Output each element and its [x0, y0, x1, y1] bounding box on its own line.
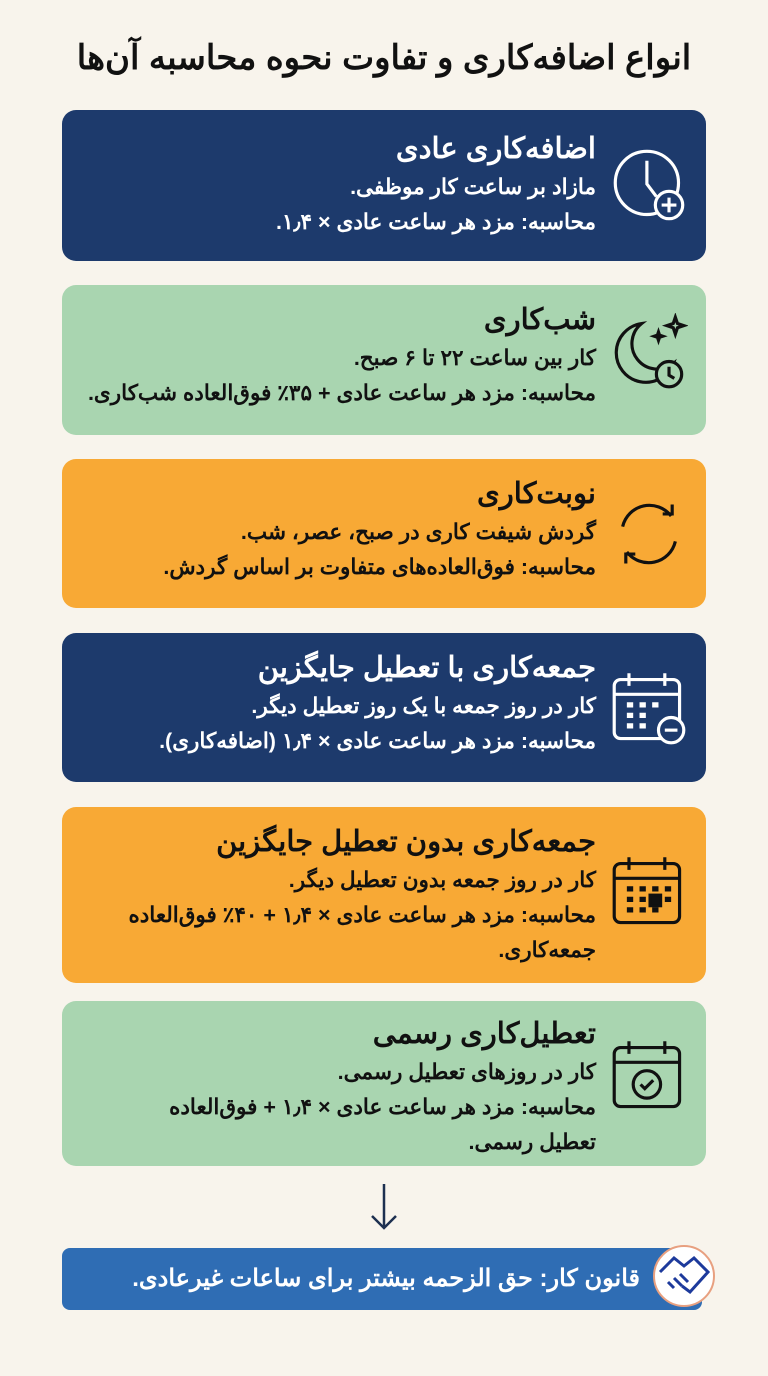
panel: regular overtime: محاسبه: مزد هر ساعت عادی × ۱٫۴.	[276, 210, 596, 234]
panel: official holiday	[62, 1001, 706, 1166]
panel: official holiday: کار در روزهای تعطیل رسمی.	[338, 1060, 596, 1084]
icon: calendar check	[612, 1041, 682, 1108]
icon: moon clock	[614, 313, 688, 388]
panel: shift work	[62, 459, 706, 608]
panel: friday with substitute: محاسبه: مزد هر ساعت عادی × ۱٫۴ (اضافه‌کاری).	[159, 729, 596, 753]
icon: rotating arrows	[621, 504, 677, 564]
panel: regular overtime: اضافه‌کاری عادی	[396, 133, 596, 165]
panel: friday without substitute: جمعه‌کاری بدون تعطیل جایگزین	[216, 826, 596, 858]
icon: calendar	[612, 857, 682, 924]
panel: night work	[62, 285, 706, 435]
panel: friday with substitute: کار در روز جمعه با یک روز تعطیل دیگر.	[251, 694, 596, 718]
panel: night work: شب‌کاری	[484, 304, 596, 336]
panel: shift work: نوبت‌کاری	[477, 478, 596, 510]
panel: regular overtime: مازاد بر ساعت کار موظفی.	[350, 175, 596, 199]
panel: friday without substitute: کار در روز جمعه بدون تعطیل دیگر.	[289, 868, 596, 892]
callout: labor law banner	[62, 1248, 702, 1310]
icon: handshake	[653, 1245, 715, 1307]
panel: shift work: محاسبه: فوق‌العاده‌های متفاوت بر اساس گردش.	[163, 555, 596, 579]
panel: friday without substitute	[62, 807, 706, 983]
panel: shift work: گردش شیفت کاری در صبح، عصر، شب.	[241, 520, 596, 544]
icon: clock plus	[614, 150, 684, 220]
panel: friday without substitute: محاسبه: مزد هر ساعت عادی × ۱٫۴ + ۴۰٪ فوق‌العاده جمعه‌کاری.	[128, 903, 596, 962]
panel: friday with substitute	[62, 633, 706, 782]
arrow: down	[371, 1184, 397, 1230]
panel: friday with substitute: جمعه‌کاری با تعطیل جایگزین	[258, 652, 596, 684]
callout: labor law banner: قانون کار: حق الزحمه بیشتر برای ساعات غیرعادی.	[132, 1265, 640, 1292]
icon: calendar minus	[612, 673, 686, 744]
panel: night work: کار بین ساعت ۲۲ تا ۶ صبح.	[354, 346, 596, 370]
panel: official holiday: محاسبه: مزد هر ساعت عادی × ۱٫۴ + فوق‌العاده تعطیل رسمی.	[169, 1095, 596, 1154]
title: انواع اضافه‌کاری و تفاوت نحوه محاسبه آن‌ها	[77, 39, 691, 77]
panel: night work: محاسبه: مزد هر ساعت عادی + ۳۵٪ فوق‌العاده شب‌کاری.	[88, 381, 596, 405]
panel: regular overtime	[62, 110, 706, 261]
panel: official holiday: تعطیل‌کاری رسمی	[373, 1018, 596, 1050]
